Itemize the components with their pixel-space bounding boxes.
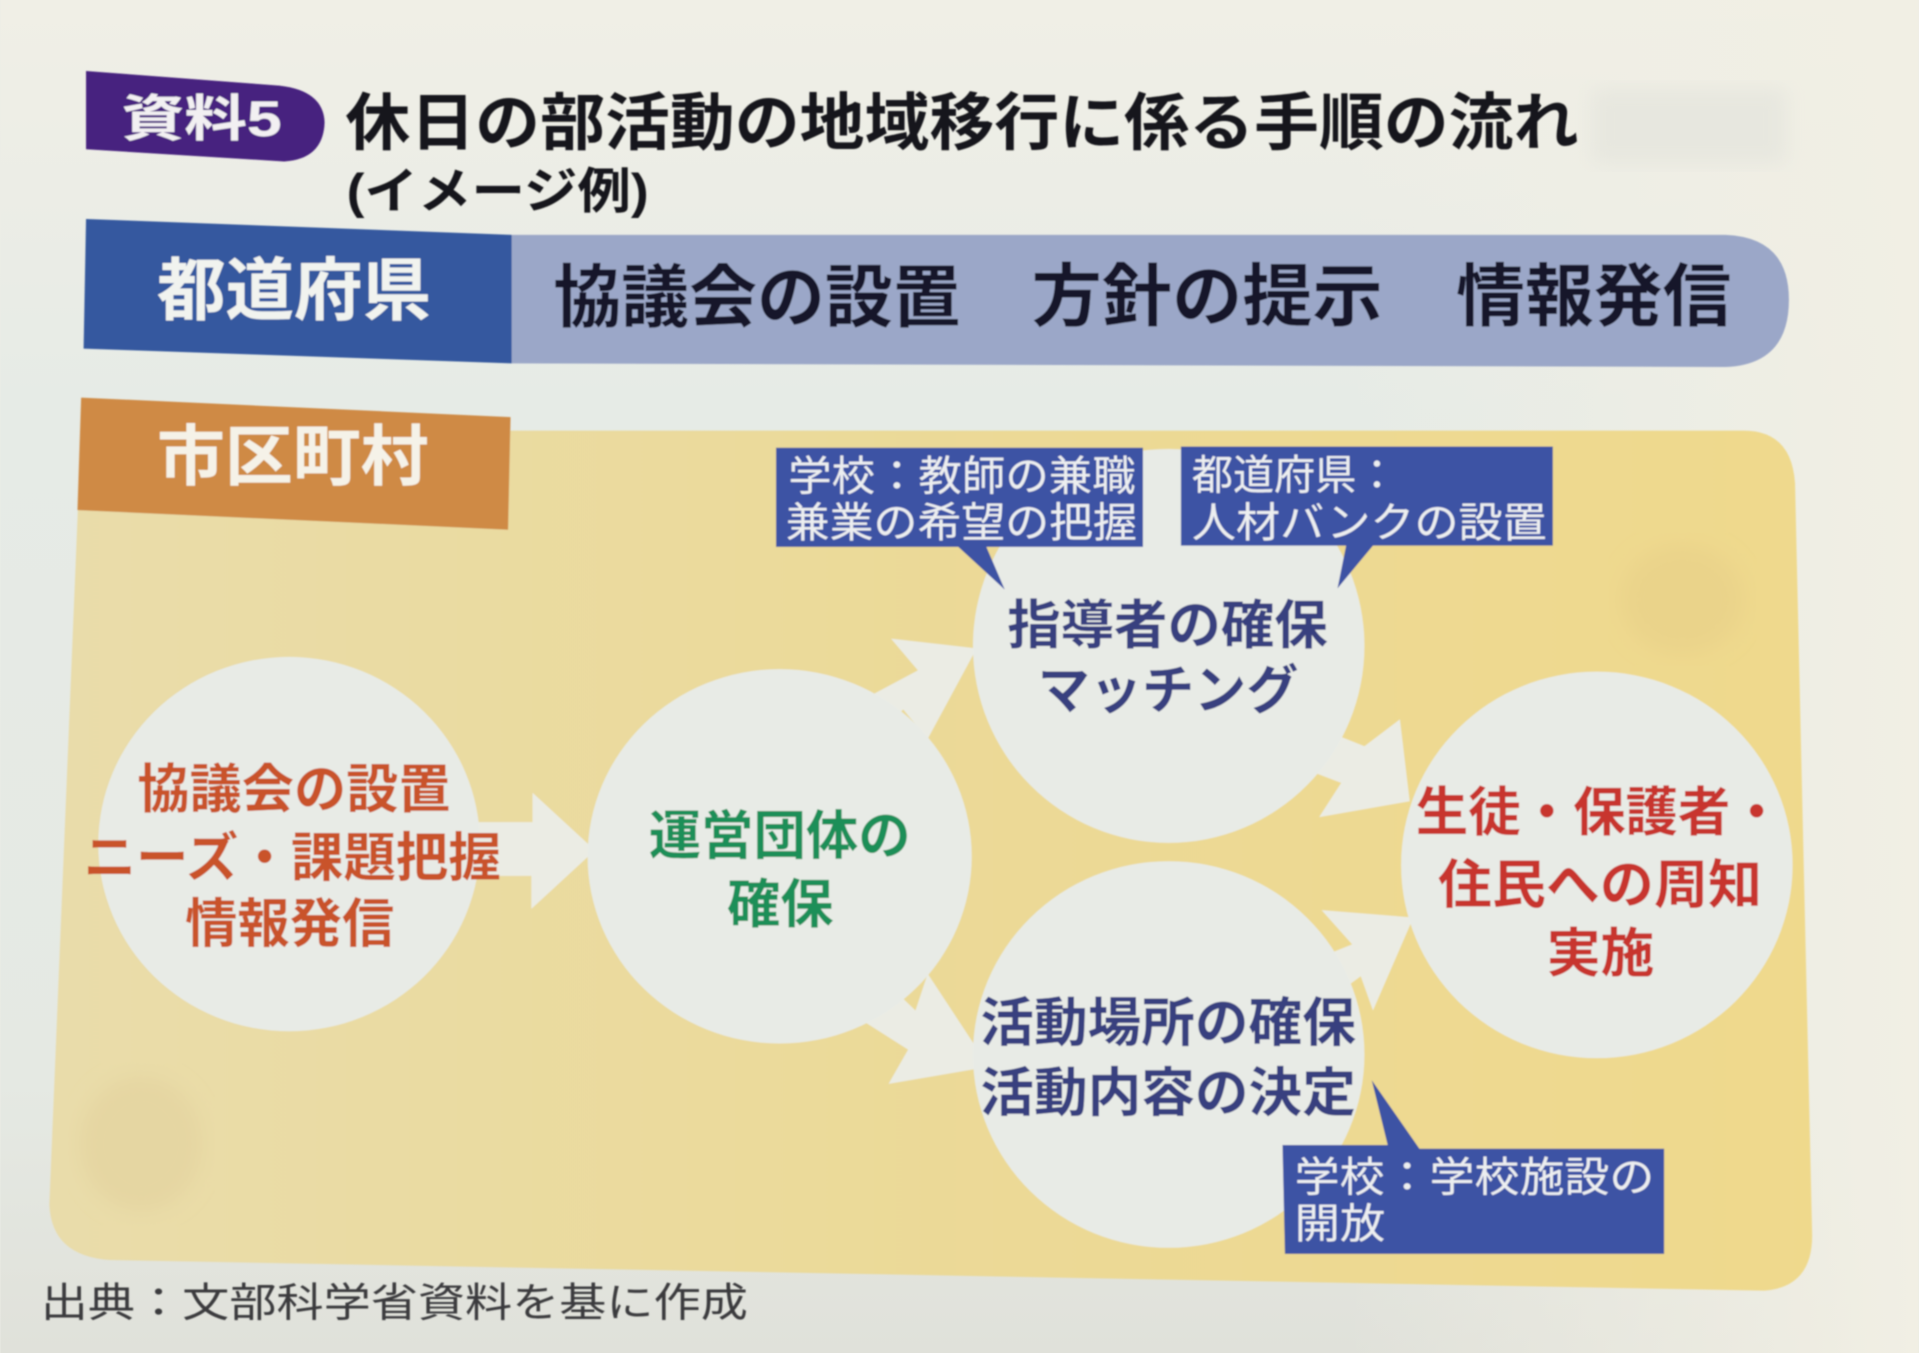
circle: 協議会の設置	[84, 657, 501, 1031]
heading tab: 市区町村: 市区町村	[157, 420, 429, 494]
circle: 生徒・保護者・住民への周知: 生徒・保護者・	[1416, 784, 1783, 843]
circle: 指導者の確保: マッチング	[1038, 661, 1298, 720]
circle: 運営団体の確保: 運営団体の	[649, 807, 911, 866]
badge: 資料5: 資料5	[122, 91, 282, 147]
banner right band: actions: 情報発信	[1456, 259, 1731, 336]
badge: 資料5	[86, 71, 325, 161]
circle: 生徒・保護者・住民への周知: 実施	[1547, 924, 1654, 983]
callout: 学校 教師の兼職兼業	[776, 448, 1143, 590]
callout: 学校 教師の兼職兼業: 兼業の希望の把握	[786, 499, 1137, 546]
banner right band: actions: 協議会の設置	[553, 260, 961, 337]
callout: 学校施設の開放: 学校：学校施設の	[1295, 1154, 1654, 1201]
arrow: 活動場所 to 周知	[1297, 910, 1413, 1010]
arrow: step 1 to 2	[453, 793, 595, 909]
circle: 協議会の設置: 協議会の設置	[137, 760, 451, 819]
callout: 都道府県 人材バンク: 人材バンクの設置	[1192, 499, 1547, 546]
source note: 出典：文部科学省資料を基に作成	[41, 1279, 748, 1325]
banner right band: actions	[512, 235, 1789, 367]
circle: 運営団体の確保: 確保	[727, 875, 834, 934]
callout: 学校施設の開放: 開放	[1295, 1200, 1385, 1247]
circle: 指導者の確保	[973, 449, 1364, 843]
banner: 都道府県	[84, 219, 1789, 367]
panel: 市区町村 background	[49, 431, 1812, 1291]
circle: 協議会の設置: 情報発信	[185, 895, 394, 954]
title	[345, 89, 1579, 219]
arrow: 指導者 to 周知	[1309, 719, 1410, 817]
banner right band: actions: 方針の提示	[1032, 259, 1383, 336]
callout: 都道府県 人材バンク: 都道府県：	[1192, 451, 1397, 498]
title: 休日の部活動の地域移行に係る手順の流れ	[345, 89, 1579, 158]
circle: 指導者の確保: 指導者の確保	[1007, 596, 1328, 655]
circle: 協議会の設置: ニーズ・課題把握	[84, 829, 501, 888]
banner: 都道府県: 都道府県	[157, 252, 431, 329]
title: (イメージ例)	[347, 165, 649, 219]
callout: 都道府県 人材バンク	[1181, 447, 1553, 588]
callout: 学校施設の開放	[1282, 1080, 1664, 1254]
circle: 活動場所の確保	[973, 861, 1364, 1248]
circle: 生徒・保護者・住民への周知	[1401, 672, 1793, 1058]
circle: 活動場所の確保: 活動場所の確保	[980, 994, 1356, 1053]
arrow: to 活動場所	[845, 954, 989, 1084]
callout: 学校 教師の兼職兼業: 学校：教師の兼職	[788, 453, 1136, 500]
circle: 生徒・保護者・住民への周知: 住民への周知	[1438, 856, 1762, 915]
arrow: to 指導者	[845, 639, 977, 741]
circle: 運営団体の確保	[588, 669, 972, 1043]
circle: 活動場所の確保: 活動内容の決定	[980, 1064, 1356, 1123]
heading tab: 市区町村	[77, 398, 511, 530]
